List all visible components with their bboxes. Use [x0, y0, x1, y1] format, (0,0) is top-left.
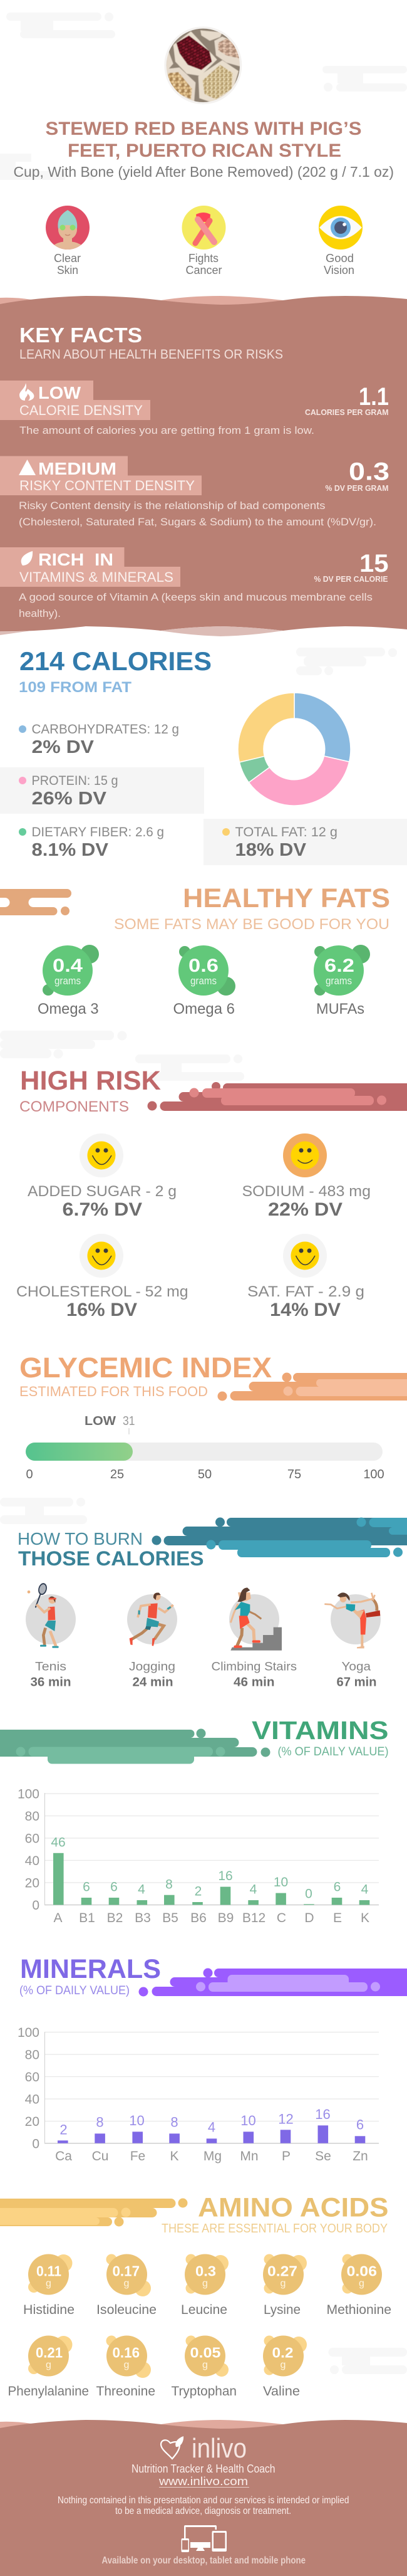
background decoration: high risk clouds [0, 1031, 244, 1081]
x axis labels [53, 1911, 369, 1925]
amino: threonine [96, 2336, 155, 2399]
availability note: Available on your desktop, tablet and mobile phone [101, 2555, 306, 2566]
risk item: saturated fat: 14% DV [270, 1300, 341, 1320]
benefit: fights cancer [182, 206, 225, 276]
x axis labels: E [333, 1911, 342, 1925]
fact: medium risky content density: Risky Content density is the relationship of bad components [19, 500, 326, 512]
amino: leucine [181, 2254, 229, 2317]
legend: protein [0, 767, 204, 814]
x axis labels: Cu [92, 2149, 108, 2163]
gauge axis: 100 [363, 1468, 384, 1481]
x axis labels: B9 [218, 1911, 234, 1925]
amino: isoleucine: 0.17 [113, 2263, 140, 2279]
amino: phenylalanine: Phenylalanine [8, 2384, 89, 2399]
amino: histidine [23, 2254, 75, 2317]
amino: valine: g [281, 2360, 286, 2370]
subheading: LEARN ABOUT HEALTH BENEFITS OR RISKS [19, 347, 283, 362]
amino: tryptophan: g [202, 2360, 208, 2370]
risk item: sodium [242, 1133, 371, 1220]
y axis labels: 40 [25, 2093, 39, 2106]
bar values: 46 [51, 1836, 66, 1849]
fat: omega 3: Omega 3 [38, 1001, 99, 1017]
how to burn section [18, 1517, 407, 1689]
heading: HIGH RISK [20, 1066, 161, 1096]
heading: THOSE CALORIES [18, 1547, 204, 1570]
amino: phenylalanine: 0.21 [36, 2345, 63, 2361]
amino: isoleucine: Isoleucine [96, 2303, 157, 2317]
x axis labels: B6 [190, 1911, 207, 1925]
x axis labels: B12 [242, 1911, 265, 1925]
disclaimer [58, 2495, 349, 2516]
how to burn section: Tenis [35, 1660, 66, 1674]
icon: warning triangle [19, 460, 36, 475]
x axis labels: K [170, 2149, 179, 2163]
risk item: cholesterol: 16% DV [66, 1300, 137, 1320]
amino: methionine: g [359, 2278, 364, 2289]
fat: MUFAs: MUFAs [316, 1001, 364, 1017]
amino: leucine: g [202, 2278, 208, 2289]
minerals section [18, 1954, 407, 2163]
fact: low calorie density: LOW [38, 383, 81, 402]
amino: threonine: 0.16 [113, 2345, 140, 2361]
legend: dietary fiber: 8.1% DV [31, 840, 109, 860]
y axis labels: 20 [25, 2115, 39, 2129]
background decoration: burn cloud [0, 1498, 87, 1524]
glycemic index section [19, 1352, 407, 1481]
bar values: 2 [195, 1885, 202, 1898]
benefit: good vision [319, 206, 363, 276]
icon: woman with face mask [46, 206, 90, 250]
amino acids section [0, 2193, 391, 2399]
background decoration: top clouds [0, 13, 407, 180]
x axis labels: P [282, 2149, 291, 2163]
bar chart: vitamins [18, 1787, 379, 1925]
icon: flame [19, 383, 34, 401]
activity: jogging [127, 1592, 177, 1646]
background decoration: amino cloud [328, 2348, 407, 2374]
amino: tryptophan: 0.05 [190, 2345, 221, 2361]
fat: omega 3: grams [54, 975, 81, 987]
y axis labels: 20 [25, 1876, 39, 1891]
bar values: 6 [110, 1879, 118, 1895]
fat: omega 6: grams [190, 975, 217, 987]
fact: medium risky content density: MEDIUM [38, 459, 116, 478]
duration: jogging: 24 min [133, 1675, 173, 1689]
x axis labels [55, 2149, 368, 2163]
bar values: 8 [165, 1877, 173, 1892]
ribbon decoration [139, 1969, 407, 1996]
gauge bar [26, 1443, 383, 1461]
risk item: added sugar: ADDED SUGAR - 2 g [28, 1183, 177, 1200]
legend: dietary fiber [19, 825, 164, 860]
amino: lysine: Lysine [264, 2303, 301, 2317]
bar values: 4 [250, 1882, 257, 1897]
subheading: calories from fat: 109 FROM FAT [19, 679, 131, 696]
icon: ribbon [182, 206, 225, 250]
gauge label [85, 1414, 135, 1434]
fact: medium risky content density: % DV PER GRAM [326, 483, 388, 493]
heading: MINERALS [20, 1954, 161, 1984]
y axis labels: 60 [25, 2070, 39, 2084]
logo: inlivo: inlivo [192, 2433, 247, 2464]
duration: tennis: 36 min [30, 1675, 71, 1689]
amino: methionine [327, 2254, 391, 2317]
amino: valine: 0.2 [272, 2345, 293, 2361]
title: FEET, PUERTO RICAN STYLE [68, 140, 341, 161]
fat: MUFAs: grams [326, 975, 352, 987]
activity: tennis [26, 1582, 76, 1648]
label: Fights [188, 252, 219, 265]
x axis labels: K [361, 1911, 369, 1925]
amino: isoleucine [96, 2254, 157, 2317]
bar values: 10 [240, 2113, 256, 2128]
amino: histidine: 0.11 [36, 2263, 61, 2279]
gauge axis [26, 1468, 384, 1481]
y axis labels: 100 [18, 2026, 39, 2040]
fact: rich in vitamins and minerals: VITAMINS & MINERALS [19, 569, 173, 585]
bar values: 6 [334, 1879, 341, 1895]
risk item: sodium: SODIUM - 483 mg [242, 1183, 371, 1200]
amino: histidine: Histidine [23, 2303, 75, 2317]
activity: yoga [324, 1592, 381, 1648]
icon: devices [182, 2525, 227, 2552]
fact: rich in vitamins and minerals: A good source of Vitamin A (keeps skin and mucous membrane cells [19, 591, 373, 603]
amino: phenylalanine [8, 2336, 89, 2399]
risk item: cholesterol: CHOLESTEROL - 52 mg [16, 1283, 188, 1300]
label [324, 252, 354, 276]
risk item: added sugar [28, 1133, 177, 1220]
fat: omega 6 [173, 945, 235, 1017]
food photo: bags of beans [164, 26, 242, 104]
amino: isoleucine: g [124, 2278, 129, 2289]
benefit: clear skin [46, 206, 90, 276]
heading [18, 1529, 204, 1570]
risk item: added sugar: 6.7% DV [63, 1199, 142, 1220]
subheading: SOME FATS MAY BE GOOD FOR YOU [114, 916, 389, 933]
heading: calories: 214 CALORIES [19, 646, 212, 676]
legend: carbohydrates: 2% DV [31, 737, 95, 757]
amino: leucine: Leucine [181, 2303, 227, 2317]
ribbon decoration [0, 1729, 270, 1757]
bar chart: minerals [18, 2026, 379, 2163]
legend: carbohydrates: CARBOHYDRATES: 12 g [31, 722, 179, 737]
x axis labels: A [53, 1911, 63, 1925]
heading: HOW TO BURN [18, 1529, 143, 1548]
background decoration: calories cloud [296, 648, 397, 675]
heading: KEY FACTS [19, 323, 142, 347]
y axis labels: 80 [25, 2048, 39, 2063]
legend: total fat [204, 819, 407, 865]
bar values: 4 [138, 1882, 145, 1897]
x axis labels: D [304, 1911, 314, 1925]
duration: yoga: 67 min [337, 1675, 377, 1689]
x axis labels: Mg [204, 2149, 222, 2163]
amino: methionine: 0.06 [347, 2263, 377, 2279]
ribbon decoration [218, 1373, 407, 1401]
how to burn section: Jogging [129, 1660, 175, 1674]
fat: MUFAs [314, 945, 370, 1017]
gauge label: 31 [123, 1414, 135, 1428]
bar values: 10 [129, 2113, 145, 2128]
bars [53, 1853, 369, 1905]
x axis labels: Se [315, 2149, 331, 2163]
legend: protein: PROTEIN: 15 g [31, 774, 118, 788]
subheading: (% OF DAILY VALUE) [278, 1745, 388, 1759]
subheading: COMPONENTS [19, 1098, 129, 1115]
fact: medium risky content density: RISKY CONTENT DENSITY [19, 478, 195, 493]
amino: lysine [263, 2254, 307, 2317]
legend: total fat: 18% DV [235, 840, 307, 860]
x axis labels: B3 [135, 1911, 151, 1925]
ribbon decoration [0, 889, 71, 915]
fat: omega 6: Omega 6 [173, 1001, 235, 1017]
label: Vision [324, 264, 354, 276]
x axis labels: B2 [107, 1911, 123, 1925]
disclaimer: to be a medical advice, diagnosis or treatment. [115, 2506, 291, 2516]
bar values [59, 2106, 364, 2138]
tagline: Nutrition Tracker & Health Coach [131, 2463, 276, 2475]
ribbon decoration [152, 1517, 407, 1545]
amino: lysine: 0.27 [267, 2263, 297, 2279]
label: Clear [54, 252, 81, 265]
fact: medium risky content density: (Cholesterol, Saturated Fat, Sugars & Sodium) to the amount (%DV/gr). [19, 516, 376, 528]
heading: HEALTHY FATS [183, 883, 390, 913]
fact: rich in vitamins and minerals: RICH IN [38, 550, 113, 569]
y axis labels [18, 2026, 39, 2152]
fat: omega 3 [38, 945, 99, 1017]
y axis labels: 100 [18, 1787, 39, 1802]
bar values: 6 [356, 2116, 364, 2133]
risk item: saturated fat: SAT. FAT - 2.9 g [247, 1283, 364, 1300]
amino: valine: Valine [263, 2384, 300, 2399]
donut chart: macronutrient share [238, 693, 351, 806]
bar values: 8 [96, 2114, 104, 2130]
fact: low calorie density: CALORIES PER GRAM [305, 407, 388, 417]
subheading: ESTIMATED FOR THIS FOOD [19, 1384, 208, 1399]
fact: low calorie density [0, 381, 389, 436]
label: Skin [57, 264, 78, 276]
y axis labels: 40 [25, 1854, 39, 1868]
heading: VITAMINS [252, 1716, 388, 1745]
serving size subtitle: Cup, With Bone (yield After Bone Removed) (202 g / 7.1 oz) [14, 164, 394, 180]
x axis labels: C [277, 1911, 286, 1925]
bar values: 4 [361, 1882, 369, 1897]
amino: methionine: Methionine [327, 2303, 391, 2317]
legend: protein: 26% DV [31, 789, 107, 809]
x axis labels: B1 [79, 1911, 95, 1925]
bar values: 4 [208, 2119, 215, 2135]
x axis labels: Ca [55, 2149, 72, 2163]
x axis labels: B5 [162, 1911, 178, 1925]
bar values [51, 1836, 369, 1901]
bar values: 2 [59, 2121, 68, 2138]
amino: leucine: 0.3 [195, 2263, 216, 2279]
heading: AMINO ACIDS [198, 2193, 388, 2223]
fat: omega 6: 0.6 [188, 955, 219, 976]
y axis labels: 0 [32, 1898, 39, 1913]
high risk section [16, 1066, 407, 1320]
amino: threonine: Threonine [96, 2384, 155, 2399]
bar values: 12 [278, 2111, 294, 2127]
how to burn section: Climbing Stairs [212, 1660, 297, 1674]
y axis labels [18, 1787, 39, 1913]
fact: low calorie density: CALORIE DENSITY [19, 402, 143, 418]
fat: omega 3: 0.4 [53, 955, 83, 976]
label [54, 252, 81, 276]
bars [58, 2125, 365, 2143]
bar values: 0 [305, 1887, 312, 1901]
amino: lysine: g [281, 2278, 286, 2289]
title: STEWED RED BEANS WITH PIG’S [45, 118, 362, 139]
fact: rich in vitamins and minerals [0, 547, 388, 619]
subheading: THESE ARE ESSENTIAL FOR YOUR BODY [162, 2222, 388, 2236]
how to burn section: Yoga [342, 1660, 371, 1674]
fat: MUFAs: 6.2 [324, 955, 354, 976]
gauge axis: 0 [26, 1468, 33, 1481]
y axis labels: 60 [25, 1832, 39, 1846]
healthy fats section [0, 883, 390, 1017]
fact: low calorie density: 1.1 [359, 383, 389, 411]
gauge axis: 50 [198, 1468, 212, 1481]
amino: histidine: g [46, 2278, 51, 2289]
legend: carbohydrates [19, 722, 179, 757]
x axis labels: Fe [130, 2149, 145, 2163]
fact: rich in vitamins and minerals: % DV PER CALORIE [314, 574, 388, 584]
y axis labels: 0 [32, 2137, 39, 2152]
label [185, 252, 222, 276]
fact: medium risky content density: 0.3 [349, 458, 389, 485]
fact: low calorie density: The amount of calories you are getting from 1 gram is low. [19, 424, 314, 436]
ribbon decoration [148, 1082, 407, 1111]
gauge axis: 75 [287, 1468, 301, 1481]
bar values: 6 [83, 1879, 90, 1895]
title [45, 118, 362, 161]
amino: tryptophan [172, 2336, 237, 2399]
amino: tryptophan: Tryptophan [172, 2384, 237, 2399]
gauge axis: 25 [110, 1468, 124, 1481]
subheading: (% OF DAILY VALUE) [19, 1984, 130, 1997]
panel: key facts [0, 296, 407, 636]
fact: medium risky content density [0, 456, 389, 528]
amino: threonine: g [124, 2360, 129, 2370]
fact: rich in vitamins and minerals: 15 [359, 550, 388, 577]
ribbon decoration [0, 2198, 188, 2227]
logo: inlivo [161, 2433, 247, 2464]
amino: phenylalanine: g [46, 2360, 51, 2370]
x axis labels: Mn [240, 2149, 259, 2163]
gauge label: LOW [85, 1414, 116, 1428]
bar values: 10 [274, 1875, 288, 1890]
risk item: cholesterol [16, 1234, 188, 1320]
bar values: 16 [218, 1869, 233, 1883]
activity: climbing stairs [229, 1587, 282, 1651]
legend: total fat: TOTAL FAT: 12 g [235, 825, 337, 839]
footer panel [0, 2420, 407, 2576]
duration: climbing stairs: 46 min [234, 1675, 274, 1689]
label: Good [326, 252, 354, 265]
fact: rich in vitamins and minerals: healthy). [19, 607, 61, 619]
risk item: saturated fat [247, 1234, 364, 1320]
bar values: 8 [170, 2114, 178, 2130]
website: www.inlivo.com [158, 2475, 248, 2488]
heading: GLYCEMIC INDEX [19, 1352, 272, 1384]
vitamins section [0, 1716, 388, 1925]
amino: valine [263, 2336, 307, 2399]
icon: leaf [21, 551, 33, 565]
icon: eye [319, 206, 363, 250]
y axis labels: 80 [25, 1809, 39, 1824]
risk item: sodium: 22% DV [268, 1199, 343, 1220]
disclaimer: Nothing contained in this presentation and our services is intended or implied [58, 2495, 349, 2506]
label: Cancer [185, 264, 222, 276]
legend: dietary fiber: DIETARY FIBER: 2.6 g [31, 825, 164, 839]
bar values: 16 [315, 2106, 331, 2122]
x axis labels: Zn [353, 2149, 368, 2163]
